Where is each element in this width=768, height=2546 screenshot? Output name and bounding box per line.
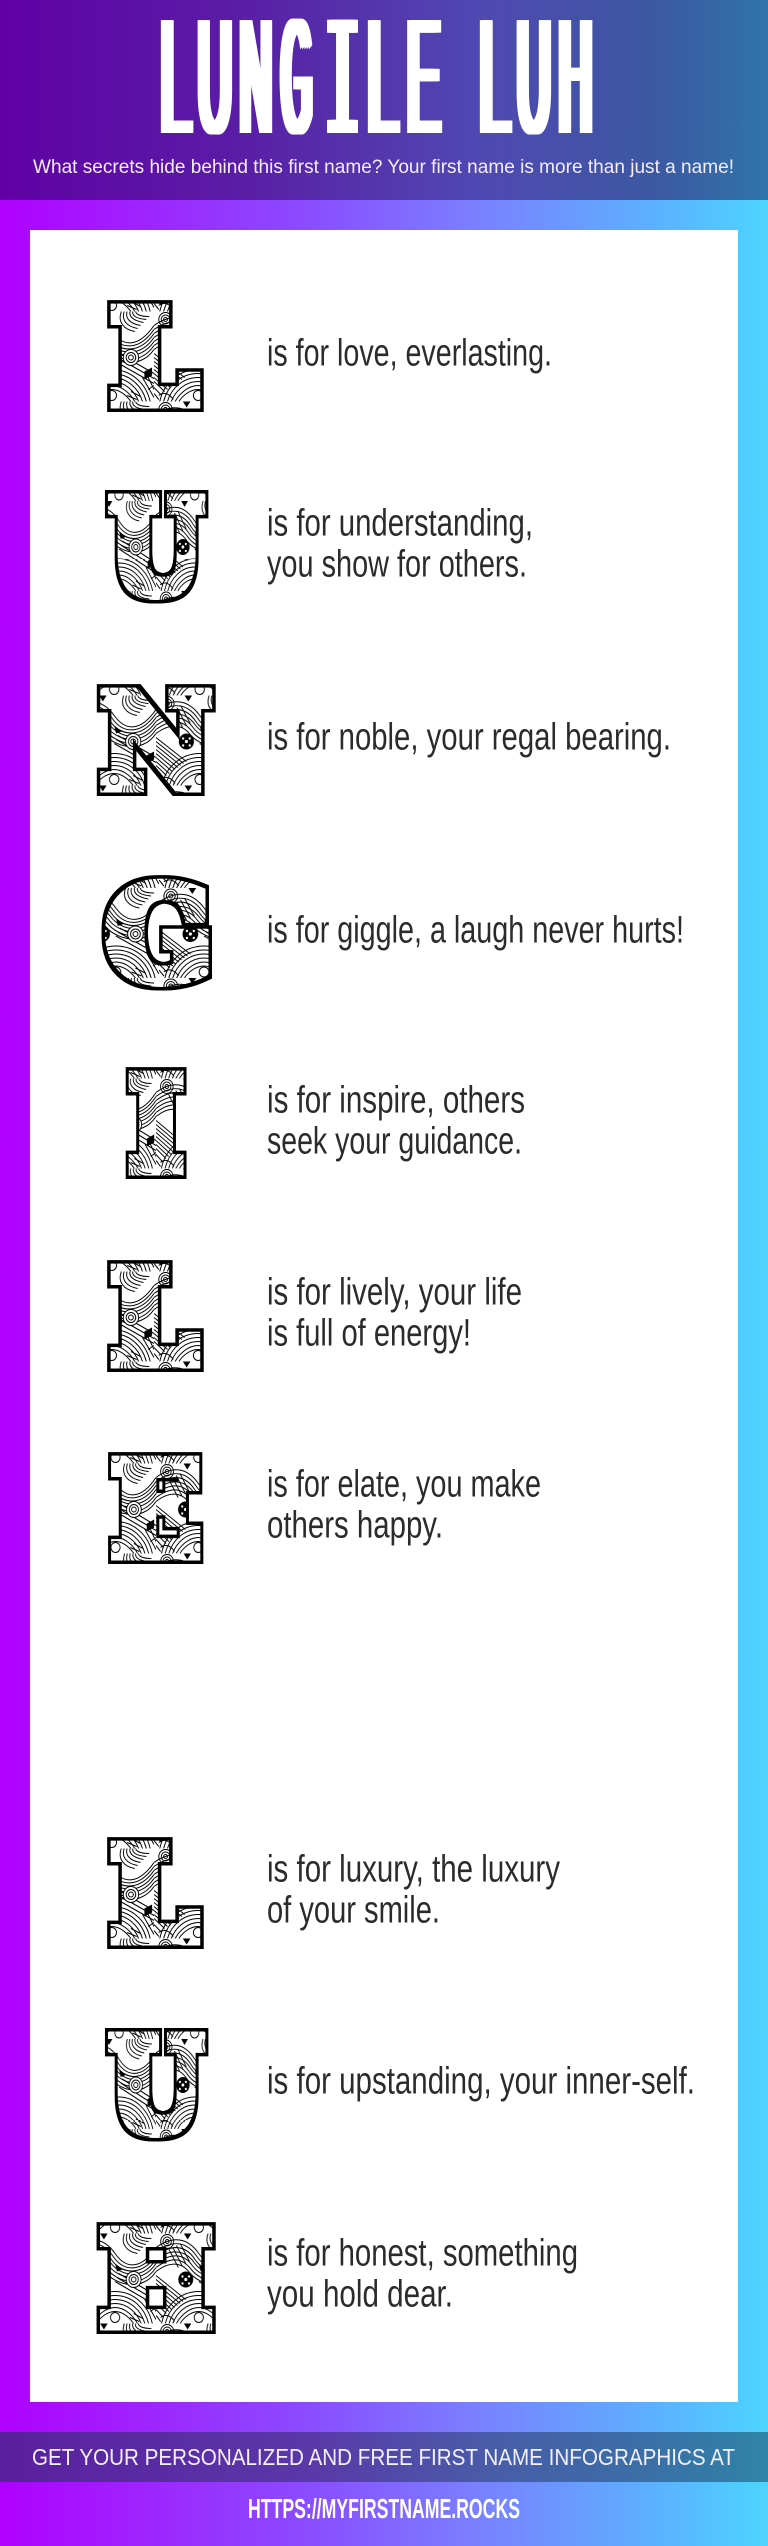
text: luxury: of your smile.	[267, 1890, 440, 1932]
text: luxury: is for luxury, the luxury	[267, 1848, 560, 1890]
footer url: HTTPS://MYFIRSTNAME.ROCKS	[248, 2493, 520, 2524]
text: inspire: is for inspire, others	[267, 1080, 525, 1122]
text: elate: others happy.	[267, 1504, 443, 1546]
row: N noble	[102, 669, 671, 815]
text: understanding: you show for others.	[267, 544, 527, 586]
text: love: is for love, everlasting.	[267, 332, 552, 374]
title	[160, 0, 592, 185]
text: honest	[267, 2232, 578, 2316]
icon: letter I: I	[130, 1052, 182, 1199]
text: inspire: seek your guidance.	[267, 1120, 522, 1162]
text: honest: you hold dear.	[267, 2274, 453, 2316]
icon: letter L: L	[112, 1821, 196, 1968]
text: lively	[267, 1272, 522, 1354]
row: U upstanding	[110, 2013, 695, 2159]
text: understanding: is for understanding,	[267, 502, 533, 544]
text: lively: is full of energy!	[267, 1312, 471, 1354]
row: H honest	[101, 2208, 578, 2354]
text: lively: is for lively, your life	[267, 1272, 522, 1314]
row: U understanding	[110, 475, 533, 621]
row: L lively	[112, 1244, 522, 1391]
icon: letter U: U	[110, 2013, 202, 2159]
icon: letter N: N	[102, 669, 210, 815]
icon: letter G: G	[107, 862, 211, 1008]
text: luxury	[267, 1848, 560, 1932]
row: I inspire	[130, 1052, 525, 1199]
row: E elate	[112, 1437, 541, 1584]
subtitle: What secrets hide behind this first name? Your first name is more than just a name!	[33, 156, 734, 178]
row: L love	[112, 284, 552, 431]
text: honest: is for honest, something	[267, 2232, 578, 2274]
content panel	[30, 230, 738, 2402]
icon: letter U: U	[110, 475, 202, 621]
header band	[0, 0, 768, 200]
icon: letter L: L	[112, 1244, 196, 1391]
text: elate: is for elate, you make	[267, 1464, 541, 1506]
row: G giggle	[107, 862, 684, 1008]
text: elate	[267, 1464, 541, 1546]
footer band	[0, 2432, 768, 2482]
text: understanding	[267, 502, 533, 586]
text: inspire	[267, 1080, 525, 1162]
icon: letter L: L	[112, 284, 196, 431]
row: L luxury	[112, 1821, 560, 1968]
icon: letter E: E	[112, 1437, 200, 1584]
icon: letter H: H	[101, 2208, 211, 2354]
